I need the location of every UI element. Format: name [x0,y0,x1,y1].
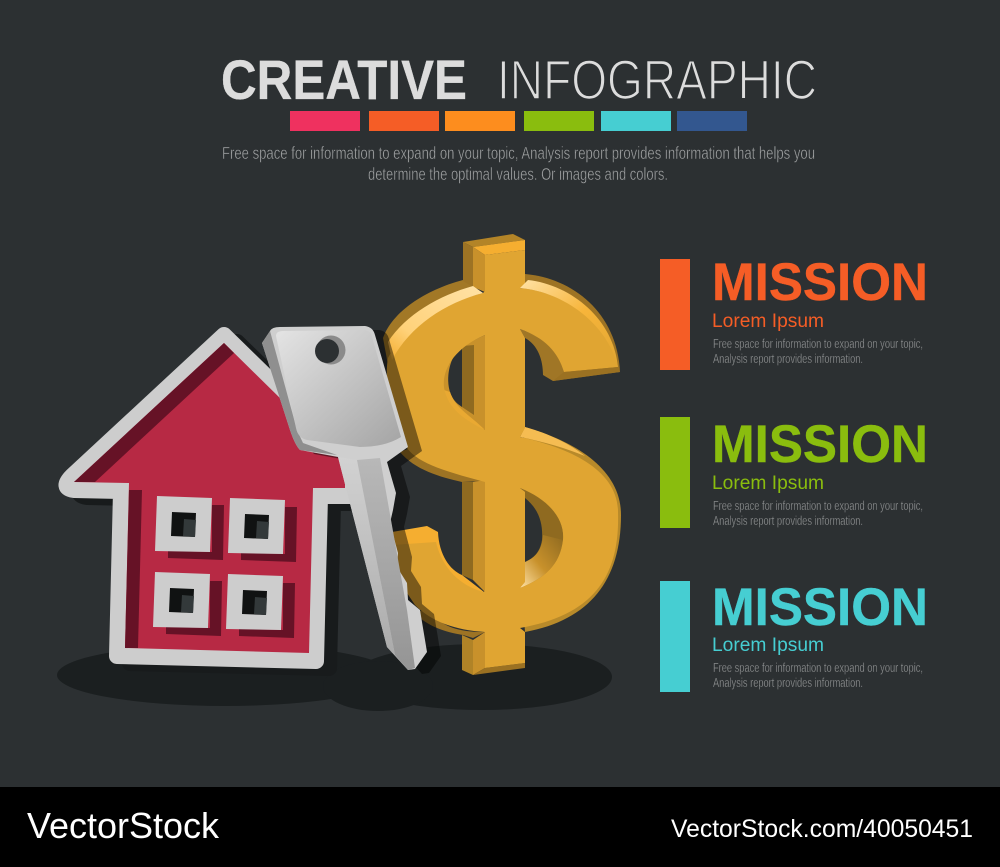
bottom left extrusion [412,610,485,638]
window bottom right [226,574,295,638]
counter upper left [443,335,485,430]
front face [387,250,618,668]
top right highlight [520,280,618,367]
top left highlight [388,286,483,360]
bar [660,417,690,528]
key silhouette [262,326,427,670]
key hole [315,336,346,364]
bar [660,259,690,370]
key side [262,331,337,455]
bar [660,581,690,692]
house outline [66,335,350,661]
heading: MISSION [712,415,928,474]
lower terminal bevel [392,526,484,600]
house shadow [79,342,363,668]
roof shade [74,343,234,482]
window top left [155,496,224,560]
description: Analysis report provides information. [713,514,863,528]
description: Free space for information to expand on your topic, [713,499,923,513]
subheading: Lorem Ipsum [712,311,824,332]
key icon [262,326,441,674]
footer url: VectorStock.com/40050451 [671,815,973,843]
mission block orange [660,253,928,370]
heading: MISSION [712,253,928,312]
ground shadow [57,644,612,711]
bar extrusion bottom [462,632,525,675]
mission block teal [660,578,928,692]
mid right extrusion [520,427,621,632]
description: Analysis report provides information. [713,352,863,366]
description: Free space for information to expand on your topic, [713,661,923,675]
description: Free space for information to expand on your topic, [713,337,923,351]
key blade [338,457,415,670]
top left extrusion [383,280,483,365]
terminal bottom edge [553,367,620,381]
top right extrusion [520,274,620,381]
house icon [66,335,363,668]
mission block green [660,415,928,528]
subheading: Lorem Ipsum [712,635,824,656]
description [713,337,923,366]
colour bar strip [290,111,747,131]
description: Analysis report provides information. [713,676,863,690]
subtitle [222,143,815,184]
wall shade [125,490,142,648]
bar extrusion middle [462,480,485,592]
mid highlight [520,427,585,456]
counter lower right [520,488,563,588]
subheading: Lorem Ipsum [712,473,824,494]
counter upper right bevel [520,329,564,381]
subtitle: Free space for information to expand on your topic, Analysis report provides information that helps you [222,143,815,163]
footer brand: VectorStock [27,805,220,846]
window bottom left [153,572,222,636]
window top right [228,498,297,562]
mid left extrusion [400,448,485,482]
key head face [276,330,401,447]
subtitle: determine the optimal values. Or images and colors. [368,164,668,184]
description [713,661,923,690]
title [221,48,817,111]
title: INFOGRAPHIC [497,48,817,111]
footer bar [0,787,1000,867]
description [713,499,923,528]
heading: MISSION [712,578,928,637]
bar extrusion top [463,234,525,292]
title: CREATIVE [221,48,467,111]
dollar sign [383,234,621,675]
house body [74,343,345,653]
key shadow [276,330,441,674]
